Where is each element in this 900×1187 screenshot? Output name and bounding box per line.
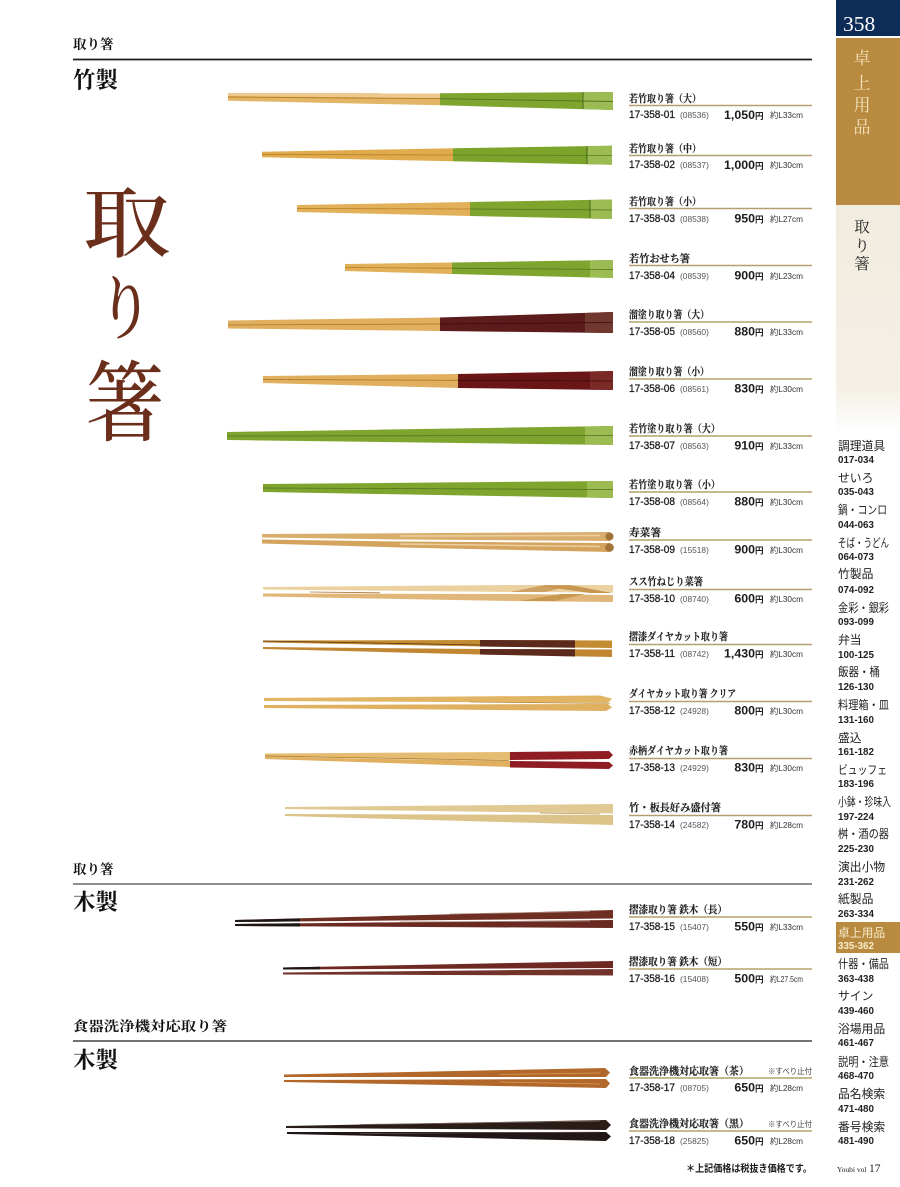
nav: 紙製品: 263-334 (838, 909, 875, 920)
label 08: 若竹塗り取り箸（小） (629, 478, 720, 491)
nav: 品名検索 (838, 1087, 885, 1115)
label 18 (629, 1117, 812, 1148)
chopsticks 10 (263, 585, 613, 602)
nav: 紙製品: 紙製品 (838, 892, 873, 906)
chopsticks 18 (286, 1120, 611, 1141)
nav: 桝・酒の器 (838, 827, 889, 855)
label 08 (629, 478, 812, 508)
nav: 演出小物 (838, 860, 885, 888)
label 14: 円 (755, 820, 764, 830)
product 06 (263, 365, 812, 396)
label 08: 880 (734, 494, 755, 508)
nav: 桝・酒の器: 桝・酒の器 (838, 827, 889, 841)
chopsticks 17 (284, 1068, 610, 1088)
label 17: 650 (734, 1080, 755, 1094)
label 12: 約L30cm (770, 706, 803, 716)
label 09: 約L30cm (770, 545, 803, 555)
label 01: 約L33cm (770, 110, 803, 120)
label 13: 円 (755, 764, 764, 774)
label 01: (08536) (680, 110, 709, 120)
label 03: 円 (755, 214, 764, 224)
label 12: 800 (734, 704, 755, 718)
nav: 説明・注意: 説明・注意 (838, 1055, 889, 1069)
nav: 弁当 (838, 633, 875, 661)
product 09 (262, 526, 812, 556)
label 02 (629, 142, 812, 172)
label 18: (25825) (680, 1136, 709, 1146)
label 03: 17-358-03 (629, 213, 675, 225)
nav: 什器・備品: 什器・備品 (838, 957, 889, 971)
category tab: 卓上用品: 卓 (854, 49, 870, 68)
label 09: 円 (755, 546, 764, 556)
label 05: 880 (734, 324, 755, 338)
chopsticks 05 (228, 312, 613, 333)
catalogue volume (837, 1163, 881, 1175)
label 06: 830 (734, 382, 755, 396)
nav: 盛込: 盛込 (838, 731, 862, 745)
nav: 鍋・コンロ: 044-063 (838, 520, 875, 531)
nav: 料理箱・皿: 料理箱・皿 (838, 698, 889, 712)
heading: 取り箸 section 2: 取り箸 (73, 861, 114, 877)
label 14: 780 (734, 818, 755, 832)
label 06: (08561) (680, 384, 709, 394)
label 02: 若竹取り箸（中） (629, 142, 701, 155)
label 05: (08560) (680, 327, 709, 337)
page number tab (836, 0, 900, 36)
label 10 (629, 575, 812, 606)
subheading: 木製 section 2: 木製 (73, 890, 118, 915)
label 13: 830 (734, 760, 755, 774)
label 12: (24928) (680, 706, 709, 716)
nav: 調理道具 (838, 439, 885, 466)
label 18: ※すべり止付 (768, 1119, 812, 1129)
nav: 卓上用品 highlighted: 335-362 (838, 941, 875, 952)
label 07: 若竹塗り取り箸（大） (629, 422, 720, 435)
label 18: 円 (755, 1136, 764, 1146)
nav: サイン (838, 989, 875, 1017)
label 06: 約L30cm (770, 384, 803, 394)
label 16: 17-358-16 (629, 973, 675, 985)
label 15: 摺漆取り箸 鉄木（長） (629, 903, 727, 916)
label 02: 17-358-02 (629, 159, 675, 171)
nav: 弁当: 弁当 (838, 633, 862, 647)
nav: 飯器・桶: 飯器・桶 (838, 665, 880, 679)
label 07: 910 (734, 438, 755, 452)
label 09 (629, 526, 812, 556)
chopsticks 11 (263, 640, 612, 657)
catalogue volume: Youbi vol (837, 1165, 866, 1174)
nav: 卓上用品 highlighted: 卓上用品 (838, 926, 885, 940)
label 10: (08740) (680, 594, 709, 604)
nav: 小鉢・珍味入 (838, 795, 891, 823)
label 10: 600 (734, 592, 755, 606)
label 11: 摺漆ダイヤカット取り箸 (629, 630, 728, 643)
label 14: 竹・板長好み盛付箸 (629, 801, 721, 814)
label 12 (629, 687, 812, 718)
chopsticks 01 (228, 92, 613, 110)
label 17: (08705) (680, 1083, 709, 1093)
calligraphy title: り (97, 253, 153, 354)
category tab: 卓上用品: 品 (854, 118, 870, 137)
label 05: 17-358-05 (629, 326, 675, 338)
product 18 (286, 1117, 812, 1148)
label 03: 若竹取り箸（小） (629, 195, 701, 208)
label 12: 円 (755, 706, 764, 716)
label 01 (629, 92, 812, 122)
label 18: 食器洗浄機対応取箸（黒） (629, 1117, 749, 1130)
chopsticks 09 (262, 532, 614, 552)
chopsticks 12 (264, 696, 612, 711)
label 16: 500 (734, 972, 755, 986)
category tab: 卓上用品: 用 (854, 96, 870, 115)
label 07: (08563) (680, 441, 709, 451)
calligraphy title: 箸 (86, 334, 164, 460)
nav: 調理道具: 017-034 (838, 455, 875, 466)
label 15: 17-358-15 (629, 921, 675, 933)
nav: 盛込 (838, 731, 875, 758)
nav: 番号検索 (838, 1120, 885, 1147)
chopsticks 08 (263, 481, 613, 498)
label 07: 17-358-07 (629, 440, 675, 452)
label 01: 17-358-01 (629, 109, 675, 121)
nav: 料理箱・皿 (838, 698, 889, 726)
label 03: 約L27cm (770, 214, 803, 224)
nav: せいろ: 035-043 (838, 487, 875, 498)
label 15: (15407) (680, 922, 709, 932)
nav: 番号検索: 481-490 (838, 1136, 875, 1147)
label 01: 1,050 (724, 108, 755, 122)
label 08: 円 (755, 498, 764, 508)
label 12: 17-358-12 (629, 705, 675, 717)
label 13: 赤柄ダイヤカット取り箸 (629, 744, 728, 757)
catalogue volume: 17 (869, 1163, 881, 1175)
nav: 小鉢・珍味入: 197-224 (838, 812, 875, 823)
nav: 浴場用品: 浴場用品 (838, 1022, 885, 1036)
label 04 (629, 252, 812, 282)
category tab: 卓上用品: 上 (854, 74, 870, 93)
label 02: 円 (755, 161, 764, 171)
nav: 桝・酒の器: 225-230 (838, 844, 875, 855)
label 11: 約L30cm (770, 649, 803, 659)
nav: 盛込: 161-182 (838, 747, 875, 758)
label 16: 約L27.5cm (770, 974, 803, 984)
label 06: 円 (755, 384, 764, 394)
label 11 (629, 630, 812, 660)
subheading: 木製 section 3: 木製 (73, 1048, 118, 1073)
label 03 (629, 195, 812, 226)
nav: 鍋・コンロ (838, 503, 887, 531)
label 13 (629, 744, 812, 774)
label 02: 1,000 (724, 158, 755, 172)
nav: 番号検索: 番号検索 (838, 1120, 885, 1134)
sub-category tab: 取り箸: り (854, 237, 870, 255)
label 05: 約L33cm (770, 327, 803, 337)
nav: ビュッフェ (838, 763, 887, 790)
chopsticks 02 (262, 146, 612, 165)
label 06: 溜塗り取り箸（小） (629, 365, 709, 378)
nav: 説明・注意 (838, 1055, 889, 1082)
heading: 取り箸: 取り箸 (73, 36, 114, 52)
chopsticks 07 (227, 426, 613, 445)
chopsticks 16 (283, 961, 613, 976)
chopsticks 04 (345, 260, 613, 278)
label 07: 約L33cm (770, 441, 803, 451)
label 05: 円 (755, 328, 764, 338)
label 06: 17-358-06 (629, 383, 675, 395)
category tab: 卓上用品 (836, 38, 900, 205)
label 11: 1,430 (724, 646, 755, 660)
label 09: 17-358-09 (629, 544, 675, 556)
label 04: 900 (734, 268, 755, 282)
label 01: 円 (755, 111, 764, 121)
product 05 (228, 308, 812, 338)
product 15 (235, 903, 812, 934)
nav: 竹製品: 074-092 (838, 585, 875, 596)
label 13: 約L30cm (770, 763, 803, 773)
label 11: (08742) (680, 649, 709, 659)
label 01: 若竹取り箸（大） (629, 92, 701, 105)
nav: 什器・備品: 363-438 (838, 974, 875, 985)
label 10: スス竹ねじり菜箸 (629, 575, 703, 588)
label 14: 約L28cm (770, 820, 803, 830)
nav: 紙製品 (838, 892, 875, 920)
nav: 鍋・コンロ: 鍋・コンロ (838, 503, 887, 517)
nav: ビュッフェ: ビュッフェ (838, 763, 887, 777)
label 10: 約L30cm (770, 594, 803, 604)
label 08: 約L30cm (770, 497, 803, 507)
product 11 (263, 630, 812, 660)
product 17 (284, 1064, 812, 1094)
label 04: 17-358-04 (629, 270, 675, 282)
nav: 品名検索: 471-480 (838, 1104, 875, 1115)
nav: 調理道具: 調理道具 (838, 439, 885, 453)
label 04: (08539) (680, 271, 709, 281)
product 10 (263, 575, 812, 606)
label 16 (629, 955, 812, 986)
nav: 飯器・桶: 126-130 (838, 682, 875, 693)
label 11: 17-358-11 (629, 648, 675, 660)
label 18: 17-358-18 (629, 1135, 675, 1147)
label 10: 17-358-10 (629, 593, 675, 605)
heading: 食器洗浄機対応取り箸: 食器洗浄機対応取り箸 (73, 1018, 228, 1034)
label 16: 摺漆取り箸 鉄木（短） (629, 955, 727, 968)
nav: 品名検索: 品名検索 (838, 1087, 885, 1101)
nav: 金彩・銀彩: 093-099 (838, 617, 875, 628)
label 09: 寿菜箸 (629, 526, 662, 539)
chopsticks 14 (285, 804, 613, 825)
product 16 (283, 955, 812, 986)
label 17: 約L28cm (770, 1083, 803, 1093)
product 07 (227, 422, 812, 452)
chopsticks 15 (235, 910, 613, 928)
label 09: 900 (734, 542, 755, 556)
sub-category tab: 取り箸: 箸 (854, 255, 870, 273)
label 14: (24582) (680, 820, 709, 830)
label 17 (629, 1064, 812, 1094)
nav: 什器・備品 (838, 957, 889, 985)
label 14 (629, 801, 812, 832)
label 06 (629, 365, 812, 396)
label 03: 950 (734, 212, 755, 226)
nav: 飯器・桶 (838, 665, 880, 693)
nav: 竹製品 (838, 567, 875, 596)
label 13: (24929) (680, 763, 709, 773)
nav: そば・うどん (838, 536, 889, 563)
label 05 (629, 308, 812, 338)
product 12 (264, 687, 812, 718)
chopsticks 03 (297, 200, 612, 219)
label 04: 若竹おせち箸 (629, 252, 690, 265)
nav: ビュッフェ: 183-196 (838, 779, 875, 790)
footnote: ＊上記価格は税抜き価格です。 (686, 1162, 812, 1175)
nav: せいろ: せいろ (838, 471, 873, 485)
label 04: 約L23cm (770, 271, 803, 281)
chopsticks 06 (263, 371, 613, 390)
product 14 (285, 801, 812, 832)
label 15 (629, 903, 812, 934)
label 15: 約L33cm (770, 922, 803, 932)
label 15: 円 (755, 922, 764, 932)
label 17: ※すべり止付 (768, 1066, 812, 1076)
label 10: 円 (755, 594, 764, 604)
label 16: 円 (755, 974, 764, 984)
label 03: (08538) (680, 214, 709, 224)
nav: 料理箱・皿: 131-160 (838, 715, 875, 726)
nav: 浴場用品: 461-467 (838, 1038, 875, 1049)
label 16: (15408) (680, 974, 709, 984)
calligraphy title (83, 162, 171, 460)
subheading: 竹製: 竹製 (73, 68, 118, 93)
label 13: 17-358-13 (629, 762, 675, 774)
nav: 弁当: 100-125 (838, 650, 875, 661)
label 07 (629, 422, 812, 452)
nav: 金彩・銀彩 (838, 601, 889, 628)
label 05: 溜塗り取り箸（大） (629, 308, 709, 321)
label 17: 食器洗浄機対応取箸（茶） (629, 1064, 749, 1078)
label 02: (08537) (680, 160, 709, 170)
label 09: (15518) (680, 545, 709, 555)
nav: 竹製品: 竹製品 (838, 567, 873, 581)
label 14: 17-358-14 (629, 819, 675, 831)
label 04: 円 (755, 272, 764, 282)
product 08 (263, 478, 812, 508)
calligraphy title: 取 (83, 162, 171, 274)
label 02: 約L30cm (770, 160, 803, 170)
label 08: 17-358-08 (629, 496, 675, 508)
nav: 卓上用品 highlighted (836, 922, 900, 953)
nav: 浴場用品 (838, 1022, 885, 1049)
label 18: 650 (734, 1134, 755, 1148)
label 15: 550 (734, 920, 755, 934)
product 13 (265, 744, 812, 774)
label 17: 円 (755, 1084, 764, 1094)
product 04 (345, 252, 812, 282)
nav: 説明・注意: 468-470 (838, 1071, 875, 1082)
product 03 (297, 195, 812, 226)
nav: サイン: 439-460 (838, 1006, 875, 1017)
navigation index (836, 439, 900, 1147)
nav: 演出小物: 演出小物 (838, 860, 885, 874)
nav: 演出小物: 231-262 (838, 877, 875, 888)
label 07: 円 (755, 442, 764, 452)
product 01 (228, 92, 812, 122)
nav: せいろ (838, 471, 875, 498)
nav: 金彩・銀彩: 金彩・銀彩 (838, 601, 889, 615)
label 17: 17-358-17 (629, 1082, 675, 1094)
label 08: (08564) (680, 497, 709, 507)
nav: そば・うどん: 064-073 (838, 552, 875, 563)
label 11: 円 (755, 650, 764, 660)
product 02 (262, 142, 812, 172)
label 18: 約L28cm (770, 1136, 803, 1146)
nav: サイン: サイン (838, 989, 873, 1003)
label 12: ダイヤカット取り箸 クリア (629, 687, 736, 700)
chopsticks 13 (265, 751, 613, 769)
sub-category tab: 取り箸: 取 (854, 218, 870, 236)
page number tab: 358 (843, 12, 875, 36)
sub-category tab: 取り箸 (836, 205, 900, 433)
